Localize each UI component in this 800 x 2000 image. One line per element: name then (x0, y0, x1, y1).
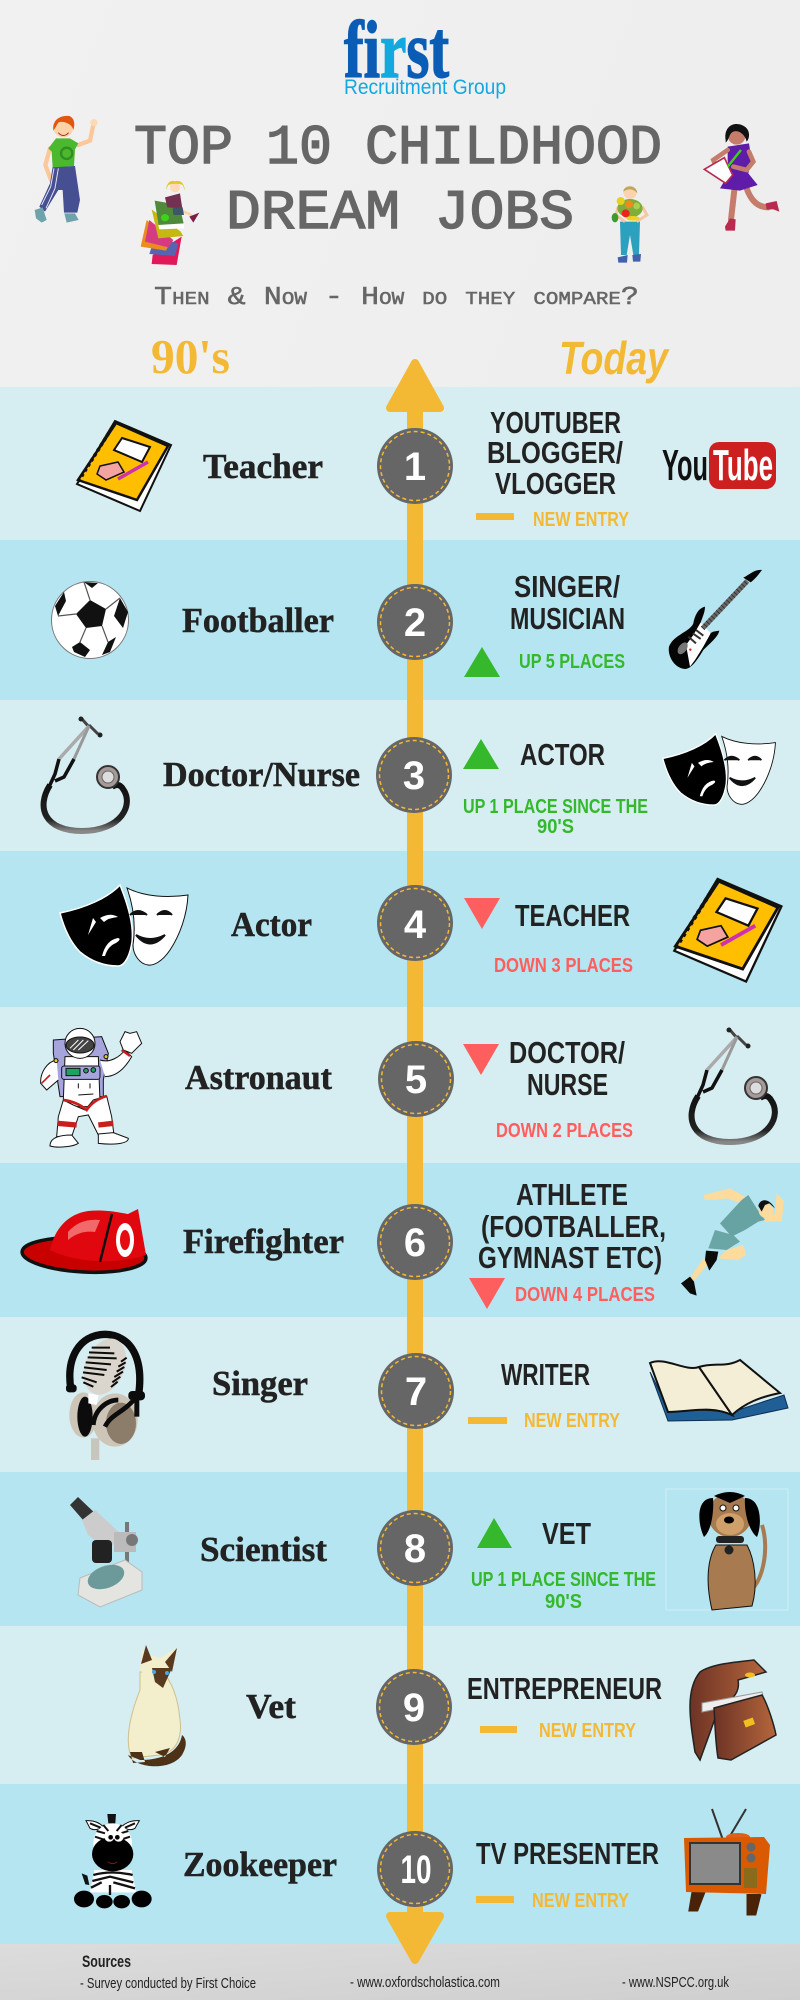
illustration: boy waving (35, 116, 98, 223)
icon: zebra (zookeeper) (74, 1814, 152, 1908)
title: DREAM JOBS (226, 181, 574, 245)
today row 2: Singer/Musician: UP 5 PLACES (519, 651, 625, 673)
today row 8: Vet: 90'S (545, 1591, 582, 1613)
today row 6: Athlete (469, 1177, 666, 1309)
sources text: - www.oxfordscholastica.com (350, 1974, 500, 1991)
today row 1: YouTuber: YOUTUBER (490, 405, 621, 440)
90's job labels: Singer (212, 1364, 308, 1403)
sources text: - Survey conducted by First Choice (80, 1975, 256, 1992)
today row 2: Singer/Musician: MUSICIAN (510, 601, 625, 636)
subtitle: Then & Now - How do they compare? (154, 282, 639, 312)
today row 9: Entrepreneur (467, 1671, 662, 1742)
icon: dog (vet) (666, 1489, 788, 1610)
icon: microphone with headphones (singer) (66, 1332, 145, 1460)
today row 1: YouTuber: NEW ENTRY (533, 509, 630, 531)
today row 7: Writer (468, 1357, 621, 1432)
90's job labels: Teacher (203, 447, 323, 486)
icon: stethoscope (today doctor) (692, 1028, 775, 1142)
rank badges 1 to 10: 8 (404, 1527, 426, 1571)
illustration: girl on books (141, 181, 199, 265)
heading: Today: Today (559, 332, 670, 384)
logo: First Recruitment Group: first (344, 4, 449, 95)
90's job labels: Scientist (200, 1530, 327, 1569)
sources text (80, 1952, 729, 1992)
today row 7: Writer: NEW ENTRY (524, 1410, 621, 1432)
rank badges 1 to 10: 9 (403, 1686, 425, 1730)
today row 5: Doctor/Nurse: DOWN 2 PLACES (496, 1120, 633, 1142)
panel: sources footer background (0, 1944, 800, 2000)
today row 3: Actor: UP 1 PLACE SINCE THE (463, 796, 648, 818)
today row 9: Entrepreneur: ENTREPRENEUR (467, 1671, 662, 1706)
today row 8: Vet: VET (542, 1516, 591, 1551)
today row 3: Actor (463, 737, 648, 838)
heading: 90's: 90's (151, 329, 230, 384)
90's job labels: Astronaut (185, 1058, 332, 1097)
today row 5: Doctor/Nurse: NURSE (527, 1067, 608, 1102)
title (134, 116, 662, 245)
illustration: child with vegetables (612, 186, 647, 263)
today row 1: YouTuber (476, 405, 630, 531)
icon: electric guitar (669, 570, 762, 669)
logo: First Recruitment Group: Recruitment Group (344, 76, 506, 99)
today row 6: Athlete: (FOOTBALLER, (481, 1209, 666, 1244)
today row 4: Teacher: DOWN 3 PLACES (494, 955, 633, 977)
illustration: running girl with clipboard (704, 124, 779, 231)
today row 5: Doctor/Nurse (463, 1035, 633, 1142)
icon: open book (writer) (650, 1360, 788, 1421)
today row 10: TV Presenter: NEW ENTRY (532, 1890, 630, 1912)
90's job labels: Actor (231, 905, 312, 944)
sources text: Sources (82, 1952, 131, 1971)
today row 5: Doctor/Nurse: DOCTOR/ (509, 1035, 625, 1070)
rank badges 1 to 10: 10 (400, 1848, 432, 1892)
rank badges 1 to 10: 6 (404, 1221, 426, 1265)
90's job labels: Doctor/Nurse (163, 755, 360, 794)
today row 1: YouTuber: BLOGGER/ (487, 435, 623, 470)
title: TOP 10 CHILDHOOD (134, 116, 662, 180)
rank badges 1 to 10: 5 (405, 1058, 427, 1102)
today row 10: TV Presenter (476, 1836, 659, 1912)
rank badges 1 to 10: 3 (403, 754, 425, 798)
today row 4: Teacher: TEACHER (515, 898, 630, 933)
sources text: - www.NSPCC.org.uk (622, 1974, 729, 1991)
90's job labels: Footballer (182, 601, 334, 640)
today row 6: Athlete: DOWN 4 PLACES (515, 1284, 655, 1306)
icon: siamese cat (vet) (128, 1645, 186, 1766)
icon: theatre masks (actor) (60, 885, 188, 966)
today row 6: Athlete: ATHLETE (516, 1177, 628, 1212)
90's job labels: Zookeeper (183, 1845, 337, 1884)
90's job labels: Firefighter (183, 1222, 344, 1261)
icon: masks (today actor) (663, 734, 775, 805)
icon: leather bag (entrepreneur) (690, 1660, 776, 1760)
today row 8: Vet: UP 1 PLACE SINCE THE (471, 1569, 656, 1591)
rank badges 1 to 10 (376, 428, 454, 1907)
icon: retro television (TV presenter) (684, 1809, 770, 1914)
today row 9: Entrepreneur: NEW ENTRY (539, 1720, 637, 1742)
today row 4: Teacher (464, 898, 633, 977)
rank badges 1 to 10: 4 (404, 903, 427, 947)
today row 6: Athlete: GYMNAST ETC) (478, 1240, 662, 1275)
90's job labels (163, 447, 360, 1884)
icon: microscope (scientist) (70, 1497, 142, 1607)
icon: notebook (today teacher) (674, 879, 781, 982)
icon: YouTube logo: You (662, 441, 708, 490)
icon: notebook (teacher) (77, 421, 171, 511)
today row 8: Vet (471, 1516, 656, 1613)
today row 1: YouTuber: VLOGGER (495, 466, 616, 501)
today row 7: Writer: WRITER (501, 1357, 590, 1392)
today row 2: Singer/Musician (464, 569, 625, 677)
rank badges 1 to 10: 2 (404, 601, 426, 645)
arrow: double-headed vertical timeline (390, 363, 440, 1960)
90's job labels: Vet (246, 1687, 296, 1726)
today row 10: TV Presenter: TV PRESENTER (476, 1836, 659, 1871)
icon: sprinting athlete (681, 1188, 784, 1296)
icon: firefighter helmet (21, 1209, 147, 1275)
today row 3: Actor: ACTOR (520, 737, 605, 772)
icon: football (52, 582, 128, 658)
icon: stethoscope (doctor) (44, 716, 127, 831)
rank badges 1 to 10: 1 (404, 445, 426, 489)
rank badges 1 to 10: 7 (405, 1370, 427, 1414)
today row 2: Singer/Musician: SINGER/ (514, 569, 620, 604)
today row 3: Actor: 90'S (537, 816, 574, 838)
icon: astronaut (41, 1028, 142, 1147)
panel: row bands (0, 387, 800, 1944)
